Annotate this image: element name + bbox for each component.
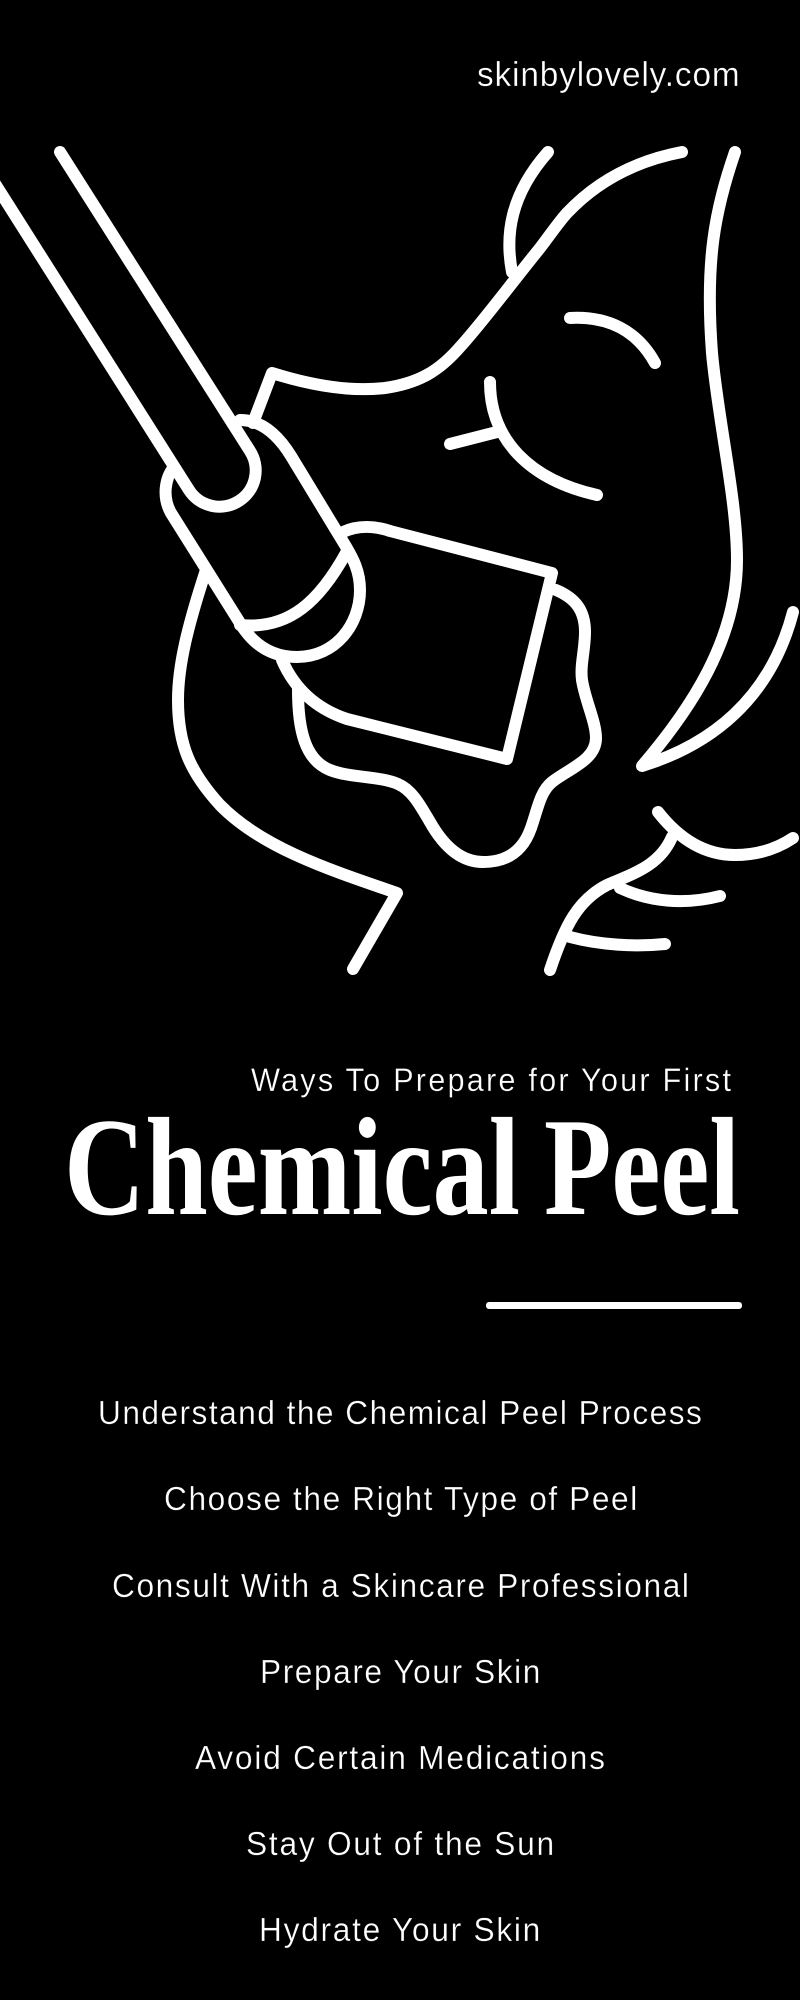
hair strand — [642, 152, 793, 766]
website url: skinbylovely.com — [477, 57, 740, 94]
main title: Chemical — [64, 1090, 520, 1245]
divider bar — [486, 1302, 742, 1309]
subtitle: Ways To Prepare for Your First — [251, 1062, 731, 1098]
collar line upper — [620, 888, 720, 901]
eyelash — [450, 432, 497, 444]
list of preparation steps — [98, 1394, 702, 1948]
collar curve — [658, 812, 793, 855]
peel mask on skin — [298, 590, 596, 862]
step 4: Prepare Your Skin — [260, 1653, 540, 1690]
brush ferrule — [166, 420, 360, 657]
brush handle — [0, 152, 256, 507]
ferrule inner curve — [240, 553, 346, 626]
step 6: Stay Out of the Sun — [246, 1825, 554, 1862]
illustration: brush applying chemical peel to face — [0, 152, 793, 970]
collar fold — [550, 837, 672, 970]
upper eyelid — [570, 318, 655, 363]
face: nose and forehead — [253, 152, 682, 423]
eyebrow line — [509, 152, 548, 272]
face: cheek and jaw — [178, 570, 397, 969]
step 3: Consult With a Skincare Professional — [112, 1567, 689, 1604]
main title: Peel — [544, 1090, 740, 1245]
brush bristles — [282, 527, 552, 759]
step 5: Avoid Certain Medications — [195, 1739, 605, 1776]
step 1: Understand the Chemical Peel Process — [98, 1394, 702, 1431]
step 2: Choose the Right Type of Peel — [164, 1480, 637, 1517]
lower eyelid — [490, 382, 597, 495]
collar line lower — [570, 937, 665, 945]
step 7: Hydrate Your Skin — [259, 1911, 540, 1948]
